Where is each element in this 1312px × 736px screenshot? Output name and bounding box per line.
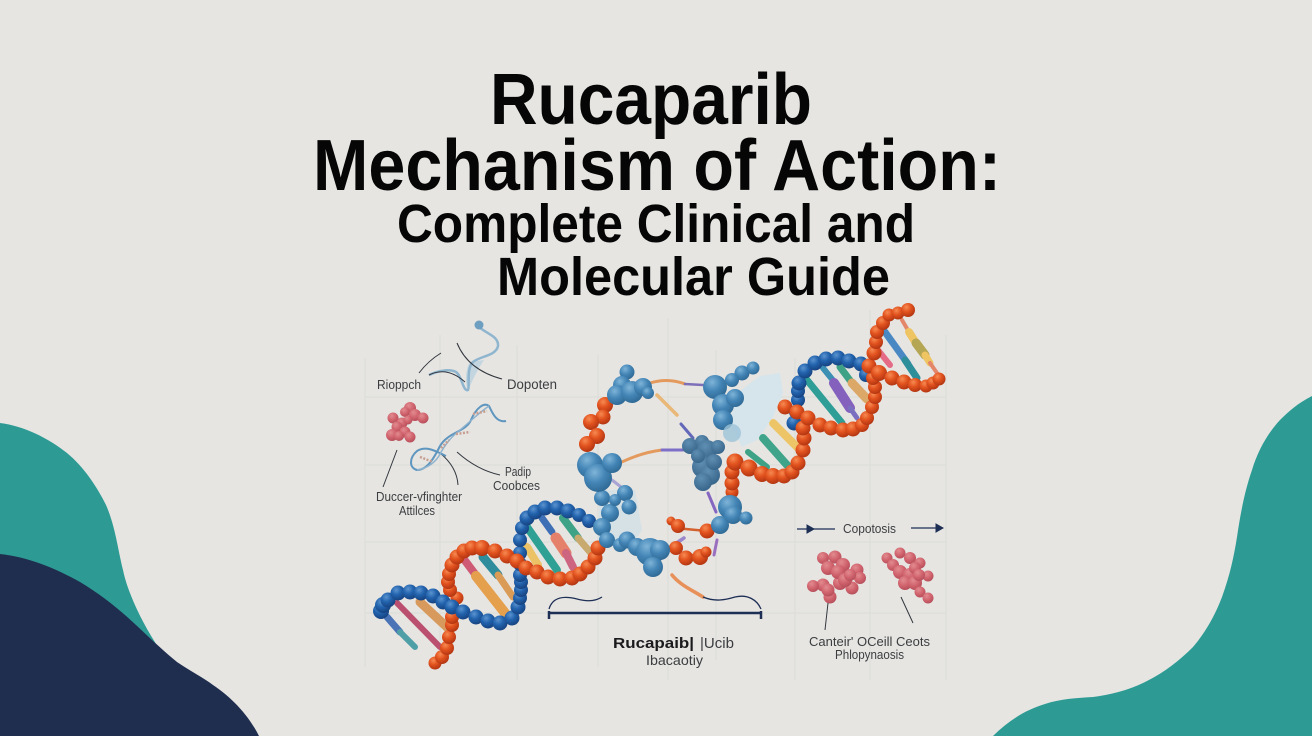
- title: Rucaparib: [490, 60, 812, 140]
- DNA helix: upper right: [724, 303, 946, 498]
- icon: pink protein top-left: [386, 402, 428, 442]
- rungs lower left: [387, 518, 590, 647]
- label: cancer cell caption: Canteir' OCeill Ceots: [809, 634, 930, 649]
- blue strand: [373, 500, 596, 630]
- pale membrane: [730, 373, 783, 447]
- bracket: [549, 596, 761, 619]
- shape: right teal corner: [993, 396, 1312, 736]
- label: Duccer-vfinghter Attilces: Duccer-vfinghter: [376, 489, 463, 504]
- label: Rucapaib: Rucapaib|: [613, 635, 694, 652]
- title: Mechanism of Action:: [313, 126, 1001, 206]
- leader lines top-left: [383, 343, 502, 487]
- icon: cancer cell cluster right: [882, 548, 934, 604]
- diagram grid: [365, 310, 946, 680]
- pale connective haze: [598, 490, 642, 550]
- orange strand upper: [724, 303, 946, 498]
- shape: left teal corner: [0, 423, 160, 736]
- label: cancer cell caption: [809, 634, 930, 662]
- orange bead groups: [579, 397, 714, 566]
- dark protein cluster: [682, 435, 725, 491]
- shape: left navy corner: [0, 554, 259, 736]
- label: Duccer-vfinghter Attilces: [376, 489, 463, 518]
- arrow: apoptosis left: [797, 525, 835, 533]
- label: Copotosis: Copotosis: [843, 521, 896, 536]
- orange strand under: [428, 540, 490, 670]
- label: Rucapaib: Ibacaotiy: [646, 652, 703, 668]
- DNA helix: lower left: [373, 500, 606, 670]
- blue strand upper: [786, 350, 873, 430]
- label: Padip Coobces: [493, 464, 540, 493]
- title: Complete Clinical and: [397, 194, 915, 254]
- linker ribbons: [610, 380, 717, 597]
- icon: top-left protein ribbon: [429, 320, 498, 390]
- label: Rucapaib: |Ucib: [700, 635, 734, 652]
- label: Padip Coobces: Padip: [505, 464, 531, 479]
- pale blue highlight: [723, 424, 741, 442]
- blue beads: [577, 362, 760, 577]
- label: Padip Coobces: Coobces: [493, 478, 540, 493]
- leader lines cancer cells: [825, 597, 913, 630]
- arrow: apoptosis right: [911, 524, 943, 532]
- rungs upper right: [748, 320, 937, 467]
- title: [313, 60, 1001, 307]
- label: cancer cell caption: Phlopynaosis: [835, 647, 904, 662]
- title: Molecular Guide: [497, 247, 890, 307]
- label: Duccer-vfinghter Attilces: Attilces: [399, 503, 435, 518]
- label: Dopoten: Dopoten: [507, 377, 557, 392]
- orange strand over: [488, 540, 606, 586]
- label: Rioppch: Rioppch: [377, 377, 421, 392]
- label: Rucapaib: [613, 635, 734, 668]
- icon: cancer cell cluster left: [807, 550, 866, 604]
- central molecule: rucaparib PARP complex: [577, 362, 783, 597]
- icon: small DNA helix: [411, 405, 506, 470]
